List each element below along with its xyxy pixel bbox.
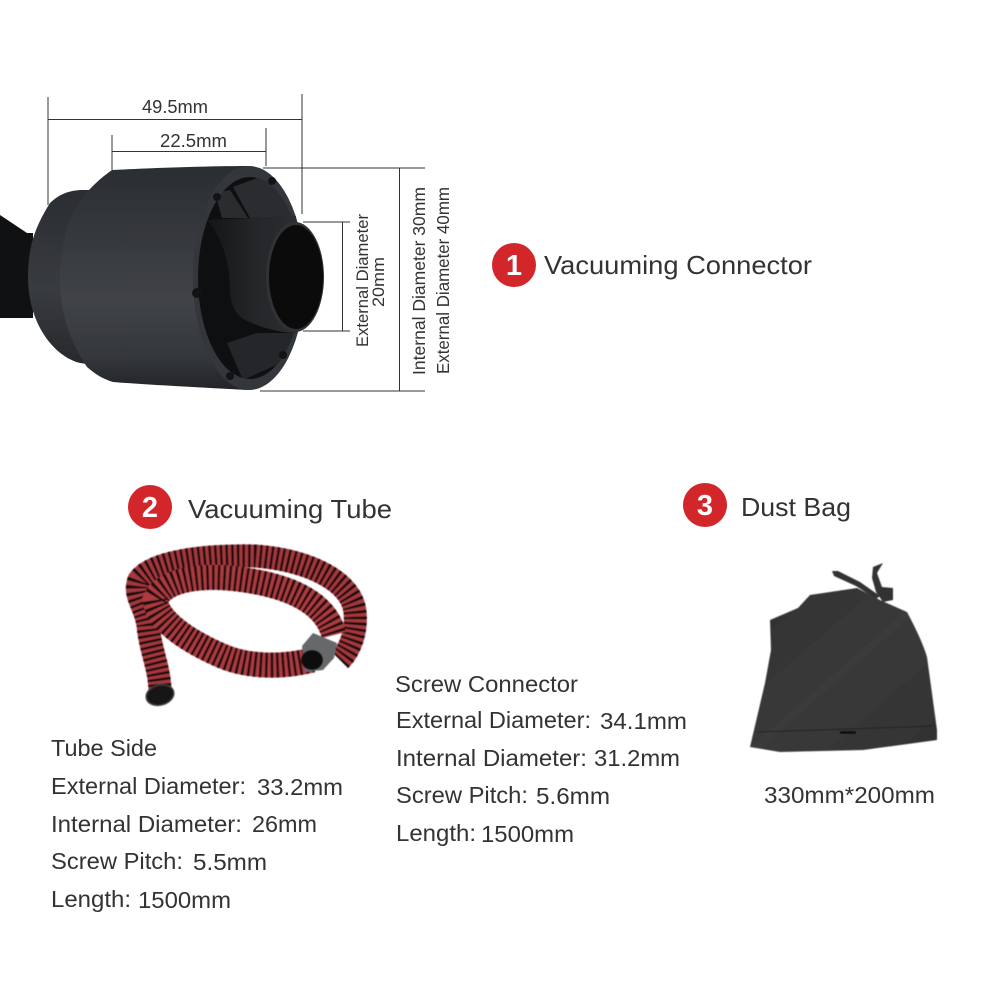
dimension: internal 30mm and external 40mm: Internal Diameter 30mm: [409, 187, 429, 375]
specifications: tube side: 1500mm: [138, 887, 231, 913]
dimension: internal 30mm and external 40mm: [260, 168, 453, 391]
specifications: tube side: Internal Diameter:: [51, 811, 242, 837]
heading: dust bag: [683, 483, 851, 527]
connector product image: [0, 166, 324, 390]
specifications: screw connector: Screw Connector: [395, 671, 578, 697]
dust bag product image: [750, 563, 937, 752]
heading: vacuuming connector: Vacuuming Connector: [544, 250, 812, 280]
heading: vacuuming tube: 2: [142, 492, 158, 524]
heading: vacuuming connector: [492, 243, 812, 287]
specifications: tube side: [51, 735, 343, 913]
specifications: screw connector: 31.2mm: [594, 745, 680, 771]
dimension: 22.5mm: 22.5mm: [160, 131, 227, 151]
specifications: tube side: 26mm: [252, 811, 317, 837]
dimension: internal 30mm and external 40mm: External Diameter 40mm: [433, 187, 453, 374]
specifications: screw connector: External Diameter:: [396, 707, 591, 733]
specifications: tube side: Length:: [51, 886, 131, 912]
panel: dust bag: [683, 483, 937, 808]
specifications: tube side: Screw Pitch:: [51, 848, 183, 874]
specifications: screw connector: Internal Diameter:: [396, 745, 587, 771]
specifications: tube side: External Diameter:: [51, 773, 246, 799]
specifications: screw connector: Length:: [396, 820, 476, 846]
heading: dust bag: Dust Bag: [741, 492, 851, 522]
dimension: external diameter 20mm: External Diameter: [353, 214, 372, 347]
dimension: external diameter 20mm: [303, 214, 388, 347]
dust bag size: 330mm*200mm: [764, 782, 935, 808]
dimension: 49.5mm: 49.5mm: [142, 97, 208, 117]
dimension: 49.5mm: [48, 94, 302, 214]
panel: vacuuming connector: [0, 94, 812, 391]
specifications: screw connector: 34.1mm: [600, 708, 687, 734]
specifications: screw connector: [395, 671, 687, 847]
heading: vacuuming connector: 1: [506, 250, 522, 282]
specifications: screw connector: Screw Pitch:: [396, 782, 528, 808]
heading: dust bag: 3: [697, 490, 713, 522]
dimension: external diameter 20mm: 20mm: [369, 257, 388, 307]
specifications: tube side: Tube Side: [51, 735, 157, 761]
heading: vacuuming tube: [128, 485, 392, 529]
specifications: tube side: 5.5mm: [193, 849, 267, 875]
specifications: screw connector: 1500mm: [481, 821, 574, 847]
dimension: 22.5mm: [112, 128, 266, 170]
panel: vacuuming tube: [51, 485, 687, 913]
tube product image: [137, 556, 355, 708]
specifications: tube side: 33.2mm: [257, 774, 343, 800]
heading: vacuuming tube: Vacuuming Tube: [188, 494, 392, 524]
specifications: screw connector: 5.6mm: [536, 783, 610, 809]
